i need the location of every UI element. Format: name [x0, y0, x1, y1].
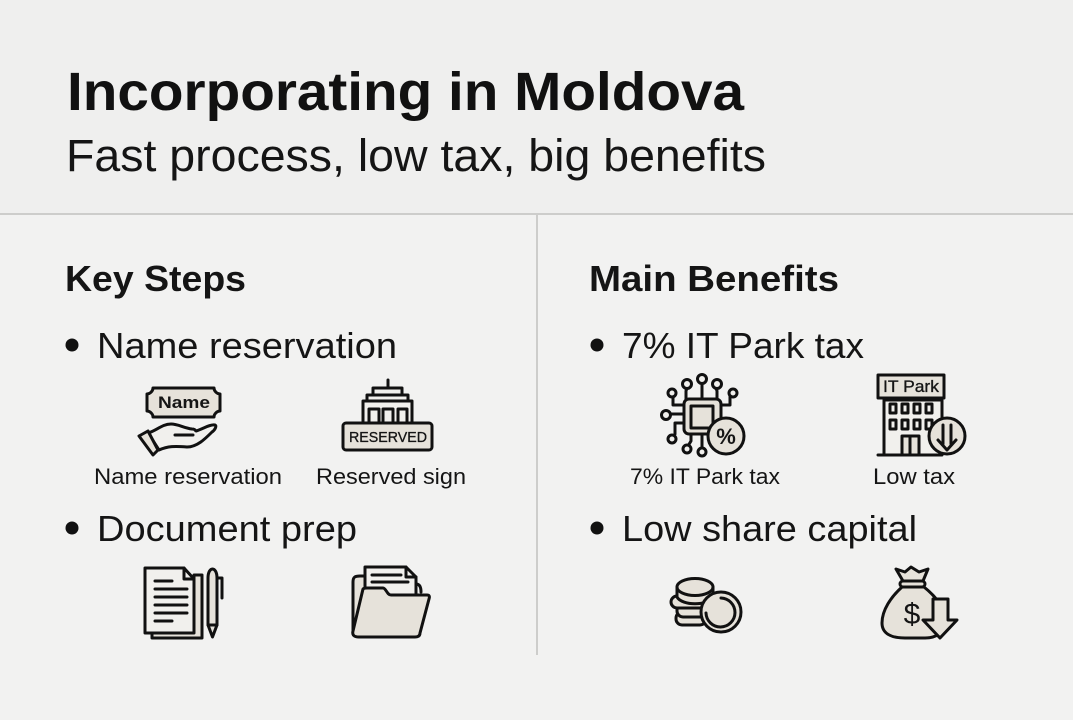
- label: reserved sign: Reserved sign: [316, 464, 466, 489]
- heading: main benefits: Main Benefits: [589, 258, 839, 299]
- bullet: document prep: Document prep: [97, 508, 357, 549]
- title: Incorporating in Moldova: [67, 62, 745, 122]
- bullet: name reservation: Name reservation: [97, 325, 397, 366]
- icon: name tag held by hand: Name: [158, 393, 210, 412]
- icon: chip with percent: %: [716, 424, 736, 449]
- header band: [0, 0, 1073, 214]
- label: name reservation: Name reservation: [94, 464, 282, 489]
- icon: it park building: [878, 375, 965, 455]
- bullet: low share capital: Low share capital: [622, 508, 917, 549]
- label: low tax: Low tax: [873, 464, 956, 489]
- label: 7% it park tax: 7% IT Park tax: [630, 464, 781, 489]
- icon: folder with documents: [353, 567, 429, 637]
- icon: document and pen: [145, 568, 222, 638]
- icon: reserved building sign: [343, 380, 432, 450]
- icon: money bag with down arrow: $: [904, 598, 921, 631]
- icon: chip with percent: [662, 374, 744, 456]
- icon: name tag held by hand: [139, 388, 220, 455]
- panel: main benefits: [589, 258, 965, 638]
- icon: reserved building sign: RESERVED: [349, 430, 427, 446]
- icon: money bag with down arrow: [882, 567, 957, 638]
- icon: coins: [671, 578, 741, 632]
- bullet: it park tax: 7% IT Park tax: [622, 325, 864, 366]
- subtitle: Fast process, low tax, big benefits: [66, 130, 766, 181]
- heading: key steps: Key Steps: [65, 258, 246, 299]
- icon: it park building: IT Park: [883, 378, 940, 396]
- panel: key steps: [65, 258, 466, 638]
